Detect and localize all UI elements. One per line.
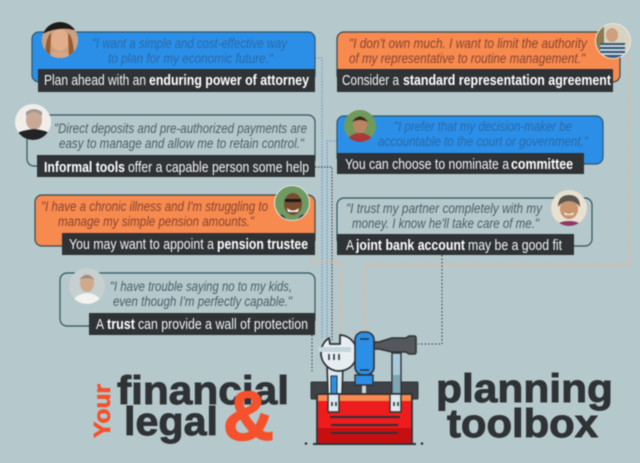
- title: planning toolbox: toolbox: [447, 402, 598, 446]
- panel: committee: [337, 110, 603, 174]
- title: planning toolbox: planning: [436, 367, 613, 411]
- label: trust: trust: [107, 317, 135, 333]
- quote: chronic illness: manage my simple pension amounts.": [58, 214, 255, 229]
- label: informal tools: Informal tools: [44, 160, 125, 176]
- latches: [328, 394, 401, 412]
- label: informal tools: offer a capable person some help: [128, 160, 309, 176]
- label: enduring power of attorney: enduring power of attorney: [149, 73, 309, 89]
- quote: direct deposits: "Direct deposits and pre-authorized payments are: [54, 121, 307, 136]
- panel: enduring power of attorney: [32, 22, 315, 92]
- label: enduring power of attorney: [38, 69, 315, 92]
- title: your financial legal and: [89, 369, 289, 455]
- icon: toolbox with wrench, screwdriver and hammer: [305, 332, 423, 445]
- panel: joint bank account: [337, 190, 592, 255]
- quote: economic future: "I want a simple and cost-effective way: [92, 36, 288, 51]
- label: committee: committee: [511, 157, 573, 173]
- quote: limit the authority: [349, 36, 588, 66]
- quote: saying no to kids: [110, 279, 293, 309]
- box body: [317, 394, 412, 444]
- quote: direct deposits: easy to manage and allow me to retain control.": [59, 136, 305, 151]
- panel: informal tools: [15, 104, 315, 177]
- label: pension trustee: pension trustee: [217, 237, 308, 253]
- wrench: [318, 335, 357, 395]
- quote: direct deposits: [54, 121, 307, 151]
- title: your financial legal and: &: [223, 377, 274, 455]
- label: standard representation agreement: standard representation agreement: [403, 73, 611, 89]
- title: your financial legal and: Your: [89, 384, 115, 438]
- quote: economic future: to plan for my economic future.": [108, 51, 274, 66]
- panel: standard representation agreement: [337, 23, 631, 92]
- quote: trust my partner: "I trust my partner completely with my: [346, 201, 543, 216]
- avatar: young man outdoors: [344, 110, 376, 142]
- label: joint bank account: [337, 234, 574, 255]
- quote: saying no to kids: "I have trouble saying no to my kids,: [110, 279, 292, 294]
- label: pension trustee: You may want to appoint a: [69, 237, 215, 253]
- label: joint bank account: A: [346, 238, 354, 254]
- base line and dots: [305, 442, 423, 445]
- avatar: smiling man with glasses: [274, 185, 310, 221]
- label: trust: A: [96, 317, 104, 333]
- avatar: man in striped shirt: [595, 23, 631, 59]
- title: planning toolbox: [436, 367, 613, 446]
- connectors: dotted lines to toolbox: [312, 57, 629, 372]
- quote: chronic illness: [41, 199, 268, 229]
- title: your financial legal and: legal: [124, 400, 218, 444]
- label: standard representation agreement: [337, 69, 613, 92]
- panel: trust: [60, 268, 315, 335]
- avatar: older woman in white: [69, 268, 105, 304]
- quote: accountable decision-maker: "I prefer that my decision-maker be: [394, 119, 572, 134]
- label: joint bank account: joint bank account: [355, 238, 465, 254]
- hammer head: [374, 336, 416, 354]
- quote: economic future: [92, 36, 288, 66]
- label: joint bank account: may be a good fit: [468, 238, 562, 254]
- screwdriver: [355, 332, 374, 385]
- label: standard representation agreement: Consider a: [342, 73, 400, 89]
- avatar: smiling older woman: [551, 190, 587, 226]
- quote: limit the authority: of my representative to routine management.": [349, 51, 586, 66]
- lid: [311, 382, 418, 399]
- label: enduring power of attorney: Plan ahead with an: [44, 73, 146, 89]
- label: committee: [337, 153, 584, 174]
- quote: chronic illness: "I have a chronic illness and I'm struggling to: [41, 199, 268, 214]
- shaft of screwdriver: [362, 385, 366, 395]
- quote: trust my partner: [346, 201, 543, 231]
- quote: trust my partner: money. I know he'll take care of me.": [352, 216, 540, 231]
- title: your financial legal and: financial: [117, 369, 289, 413]
- quote: accountable decision-maker: [378, 119, 589, 149]
- quote: limit the authority: "I don't own much. I want to limit the authority: [349, 36, 588, 51]
- hammer handle: [392, 353, 401, 394]
- label: trust: can provide a wall of protection: [138, 317, 308, 333]
- avatar: woman with dark hat: [42, 22, 78, 58]
- label: committee: You can choose to nominate a: [345, 157, 510, 173]
- label: informal tools: [37, 155, 315, 177]
- label: trust: [89, 313, 315, 335]
- label: pension trustee: [62, 233, 315, 255]
- panel: pension trustee: [35, 185, 315, 255]
- quote: accountable decision-maker: accountable to the court or government.": [378, 134, 589, 149]
- quote: saying no to kids: even though I'm perfectly capable.": [113, 294, 293, 309]
- avatar: bald older man: [15, 104, 51, 140]
